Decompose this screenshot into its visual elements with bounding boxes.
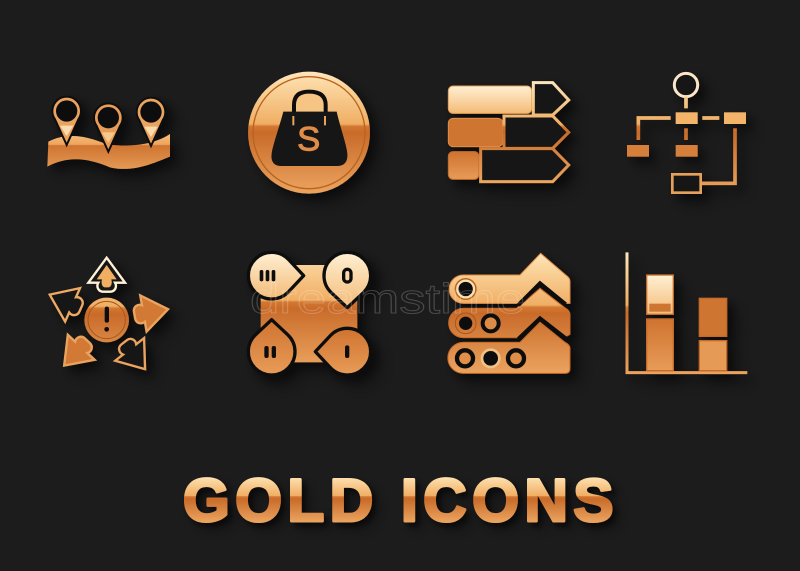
icon: layered arrows with dots — [448, 253, 570, 373]
start node — [674, 73, 698, 97]
dollar label: S — [297, 121, 320, 159]
icon: stacked bar arrows — [448, 83, 569, 182]
arrow left — [42, 278, 88, 325]
layer two — [449, 288, 570, 338]
process boxes — [676, 112, 698, 124]
arrow lower left — [51, 328, 101, 378]
arrow right — [131, 291, 171, 333]
icon: alert with arrows — [42, 258, 171, 380]
bag body — [271, 112, 347, 166]
end node — [672, 174, 701, 193]
bar one lower — [647, 319, 673, 371]
pin bottom left — [248, 320, 295, 375]
icon: bar chart — [627, 252, 747, 373]
map ribbon — [47, 134, 170, 169]
axes — [627, 252, 747, 373]
pin top right — [324, 252, 371, 308]
alert circle — [84, 298, 129, 342]
bar row three — [448, 152, 479, 179]
central square — [261, 265, 357, 362]
title: GOLD ICONS — [183, 467, 619, 534]
bar two upper — [699, 298, 727, 336]
icon: shopping bag coin — [248, 72, 370, 194]
icon: square with four location pins — [248, 252, 371, 375]
arrow lower right — [110, 331, 159, 380]
bag handle — [294, 92, 326, 113]
pin two — [94, 103, 123, 152]
coin — [248, 72, 370, 194]
pin top left — [248, 252, 304, 299]
bar two lower — [699, 341, 727, 371]
bar row one — [448, 86, 532, 113]
icon: location pins on map ribbon — [47, 97, 170, 169]
layer one dot — [455, 278, 477, 300]
layer three dots — [457, 350, 473, 366]
layer one — [449, 253, 570, 303]
watermark: dreamstime — [250, 275, 525, 322]
pin one — [52, 97, 81, 145]
pin three — [137, 98, 165, 146]
pin bottom right — [315, 328, 371, 375]
layer three — [448, 322, 570, 373]
layer two dots — [459, 317, 472, 330]
bar row two — [448, 118, 503, 147]
bar one upper — [647, 275, 673, 314]
arrow up — [88, 258, 125, 292]
icon: flowchart — [627, 73, 746, 193]
